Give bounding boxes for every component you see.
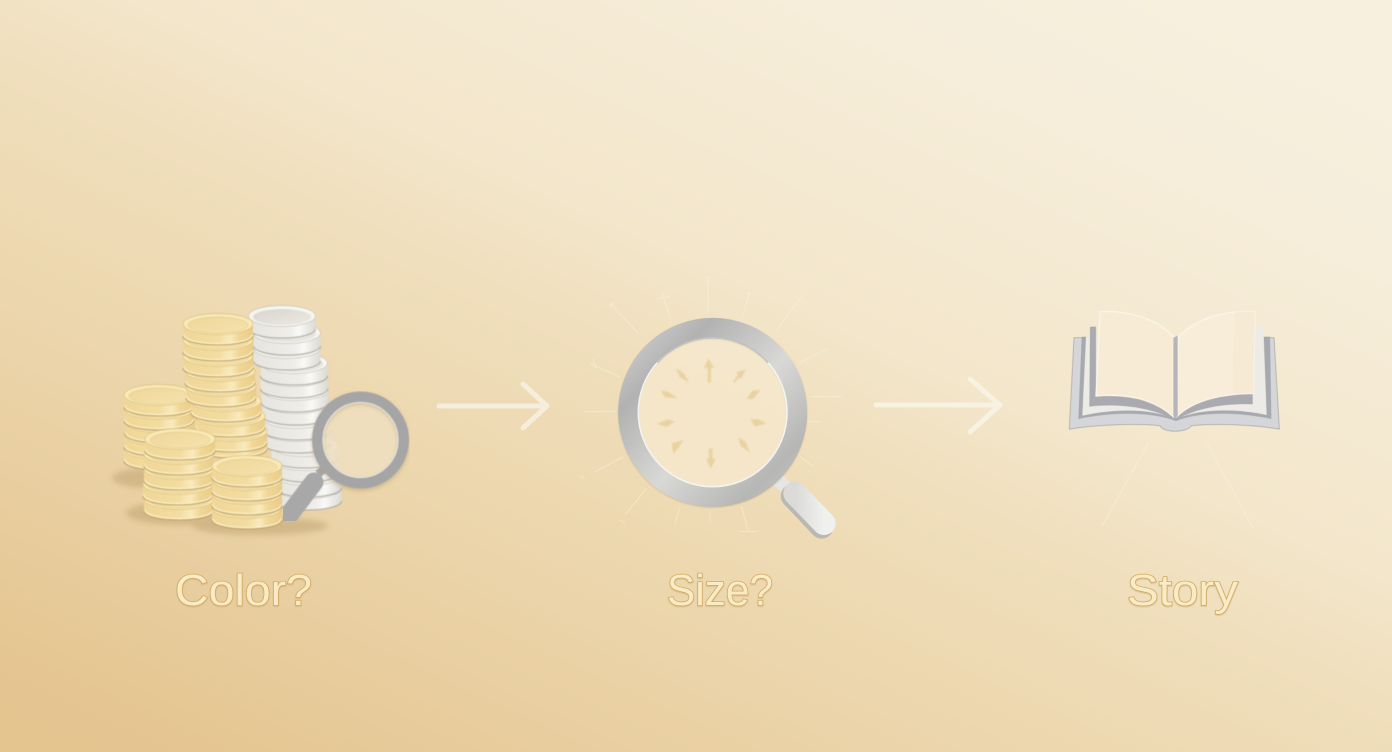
centre gold coin stack — [183, 314, 267, 458]
cover — [1069, 338, 1279, 431]
icon: open book — [1069, 311, 1279, 528]
inner shadow — [1089, 327, 1253, 420]
ring — [628, 328, 797, 497]
faint rays — [1102, 443, 1253, 528]
inner arrows — [656, 358, 767, 469]
icon: coin stacks with magnifier — [112, 306, 404, 535]
lens — [638, 338, 787, 487]
arrow: size to story — [876, 379, 1000, 432]
arrow: color to size — [439, 384, 547, 428]
handle — [778, 480, 824, 527]
left gold coin stack — [124, 384, 195, 470]
left page — [1096, 311, 1173, 417]
page shadow — [1078, 337, 1271, 421]
radiating outer rays — [580, 277, 842, 532]
coin shadows — [112, 468, 328, 535]
page block — [1082, 327, 1267, 419]
spine — [1173, 336, 1178, 419]
icon: large magnifier with arrows — [580, 277, 842, 532]
silver coin stack — [248, 306, 342, 510]
label: Story: Story — [1127, 566, 1238, 615]
front gold coin stack — [143, 428, 215, 520]
small front gold coin stack — [212, 456, 282, 529]
right page — [1177, 311, 1255, 417]
label: Color?: Color? — [175, 566, 312, 615]
label: Size?: Size? — [667, 566, 773, 615]
icon: small magnifier — [289, 397, 404, 515]
